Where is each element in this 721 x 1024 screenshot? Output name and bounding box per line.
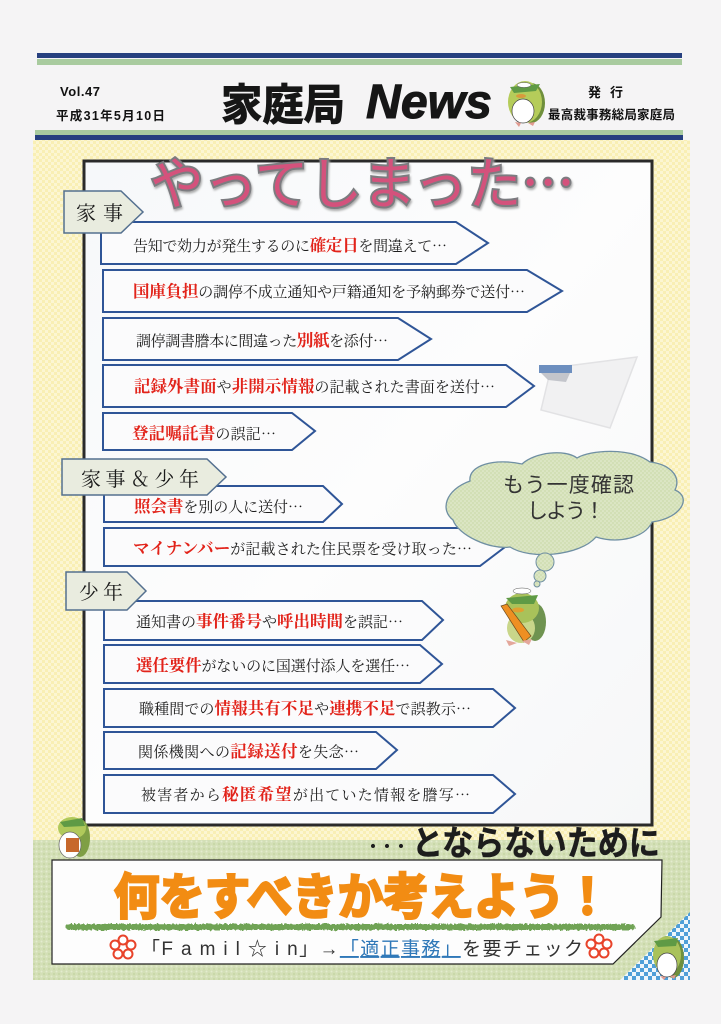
tag: family affairs and juvenile [62,459,226,495]
issue number and date: Vol.47 [60,84,100,99]
arrow 11: 関係機関への記録送付を失念… [138,738,359,762]
arrow 3: 調停調書謄本に間違った別紙を添付… [136,327,388,351]
arrow 2 [103,270,562,312]
publisher [548,85,675,122]
arrow 2: 国庫負担の調停不成立通知や戸籍通知を予納郵券で送付… [133,278,525,302]
arrow 5: 登記嘱託書の誤記… [132,420,276,444]
arrow 8: 通知書の事件番号や呼出時間を誤記… [136,608,403,632]
publisher: 発行 [588,85,623,100]
panel: green footer background [33,840,690,980]
issue number and date [56,84,165,123]
tag: family affairs and juvenile: 家事＆少年 [81,468,199,491]
title: family bureau news: News [366,76,492,129]
check line: 「F a m i l ☆ i n」→「適正事務」を要チェック [141,938,583,960]
arrow 1 [101,222,488,264]
arrow 7: マイナンバーが記載された住民票を受け取った… [133,535,472,559]
icon: mascot header [508,81,545,127]
thought cloud: もう一度確認 [503,474,634,497]
arrow 12 [104,775,515,813]
illustration: sheet of paper and books [539,357,637,428]
arrow 5 [103,413,315,450]
arrow 10: 職種間での情報共有不足や連携不足で誤教示… [139,695,471,719]
title: family bureau news [221,76,492,130]
arrow 1: 告知で効力が発生するのに確定日を間違えて… [133,232,447,256]
icon: mascot with pencil [501,588,546,646]
arrow 8 [104,601,443,640]
arrow 9: 選任要件がないのに国選付添人を選任… [136,652,410,676]
arrow 11 [104,732,397,769]
tag: family affairs: 家事 [76,202,123,225]
heading: so that it does not happen: とならないために [412,825,660,863]
title: family bureau news: 家庭局 [221,82,345,130]
publisher: 最高裁事務総局家庭局 [548,107,675,122]
tag: juvenile: 少年 [79,581,123,604]
green crayon line [66,924,635,930]
arrow 4 [103,365,534,407]
heading: yatte shimatta: やってしまった… [150,140,575,221]
panel: main frame [84,161,652,825]
headline: think about what to do: 何をすべきか考えよう！ [114,871,610,925]
thought cloud [446,451,683,587]
heading: so that it does not happen: ・・・ [365,839,409,856]
icon: flower right [586,934,612,958]
thought cloud: しよう！ [527,500,605,523]
header rules [35,53,683,140]
arrow 6: 照会書を別の人に送付… [134,493,303,517]
icon: mascot corner [653,936,684,980]
arrow 7 [104,528,505,566]
tag: family affairs [64,191,143,233]
arrow 12: 被害者から秘匿希望が出ていた情報を謄写… [141,781,470,805]
icon: mascot with book [58,817,90,858]
icon: flower left [110,936,136,958]
panel: call to action [52,860,662,964]
tag: juvenile [66,572,146,610]
arrow 3 [103,318,431,360]
arrow 9 [104,645,442,683]
arrow 10 [104,689,515,727]
arrow 6 [104,486,342,522]
issue number and date: 平成31年5月10日 [56,108,165,123]
corner triangle [620,912,690,980]
arrow 4: 記録外書面や非開示情報の記載された書面を送付… [134,373,495,397]
panel: yellow background [33,140,690,842]
